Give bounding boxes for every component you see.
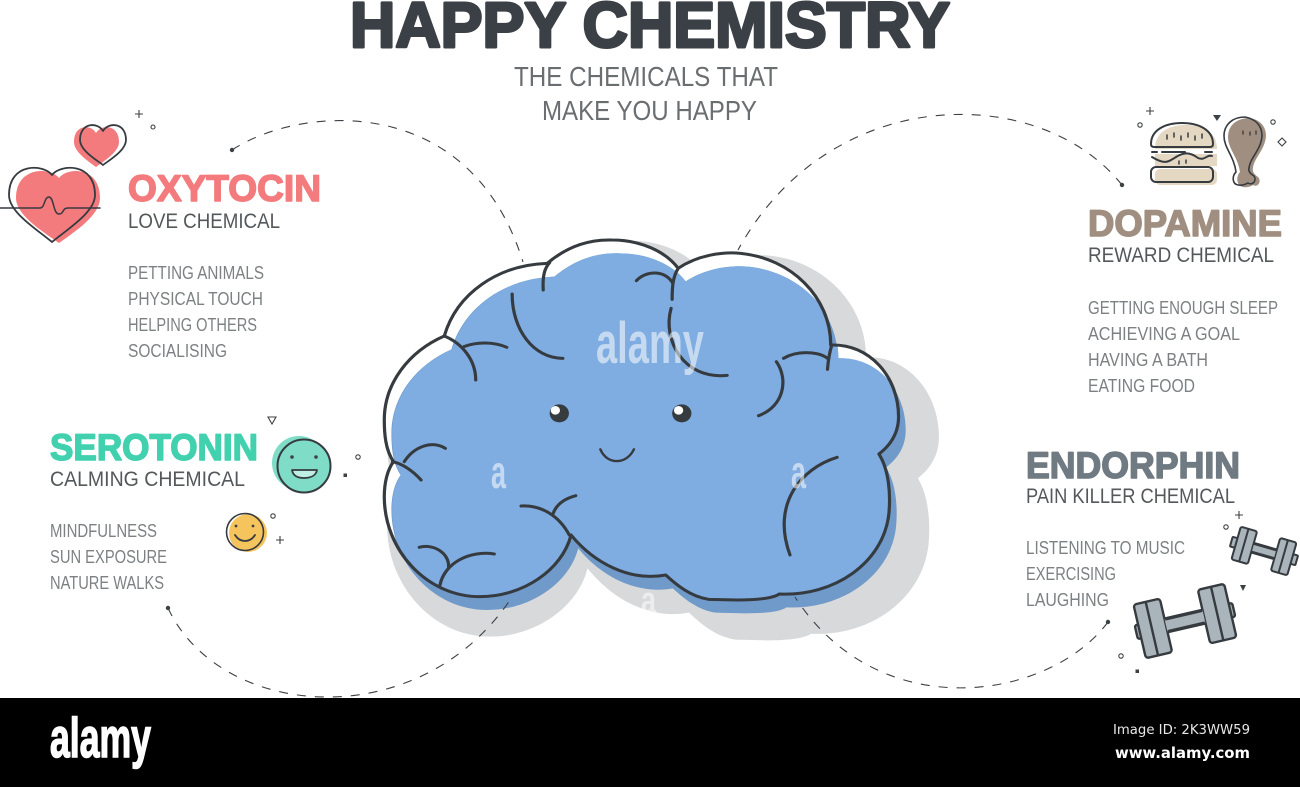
watermark [491,311,806,622]
icon: small dumbbell [1227,525,1300,577]
list: LAUGHING [1026,590,1109,610]
icon: burger and drumstick [1138,107,1286,187]
panel: dopamine [1088,107,1286,396]
dashed connector: dopamine [738,114,1124,250]
watermark: alamy [596,311,704,376]
list [50,521,167,593]
icon: large dumbbell [1130,583,1240,659]
icon: smiley faces [226,417,360,552]
alamy logo: alamy [50,706,151,769]
subtitle [514,61,778,126]
list: PETTING ANIMALS [128,263,264,283]
watermark: a [641,580,657,622]
heading: ENDORPHIN [1026,445,1240,486]
subheading: LOVE CHEMICAL [128,210,280,233]
brain dark blue edge [391,253,906,613]
list: ACHIEVING A GOAL [1088,324,1240,344]
dashed connector: endorphin [795,597,1110,688]
subheading: REWARD CHEMICAL [1088,244,1274,267]
dashed connector: oxytocin [230,121,523,262]
list [1026,538,1185,610]
list: NATURE WALKS [50,573,164,593]
watermark: a [491,446,506,498]
brain face [550,404,691,461]
subtitle: THE CHEMICALS THAT [514,61,778,92]
list: HELPING OTHERS [128,315,257,335]
website: www.alamy.com [1115,744,1250,762]
list: EATING FOOD [1088,376,1195,396]
subheading: PAIN KILLER CHEMICAL [1026,485,1235,508]
heading: SEROTONIN [50,427,258,468]
list: SOCIALISING [128,341,227,361]
brain grey shadow [387,241,939,640]
heading: OXYTOCIN [128,168,321,209]
heading: DOPAMINE [1088,203,1282,244]
decorative marks [1119,511,1246,673]
list [128,263,264,361]
list: HAVING A BATH [1088,350,1208,370]
brain character [384,240,939,640]
list: SUN EXPOSURE [50,547,167,567]
list: LISTENING TO MUSIC [1026,538,1185,558]
panel: oxytocin [0,110,321,361]
list: PHYSICAL TOUCH [128,289,263,309]
image id: Image ID: 2K3WW59 [1113,722,1250,738]
brain outline and folds [384,240,899,600]
footer bar [0,698,1300,787]
list: EXERCISING [1026,564,1116,584]
brain white base [384,240,899,600]
list [1088,298,1278,396]
icon: hearts [0,110,155,243]
subheading: CALMING CHEMICAL [50,468,245,491]
dashed connector: serotonin [166,597,512,697]
panel: serotonin [50,417,360,593]
brain blue fill [392,253,906,613]
subtitle: MAKE YOU HAPPY [542,95,757,126]
panel: endorphin [1026,445,1300,673]
list: MINDFULNESS [50,521,157,541]
watermark: a [791,446,806,498]
